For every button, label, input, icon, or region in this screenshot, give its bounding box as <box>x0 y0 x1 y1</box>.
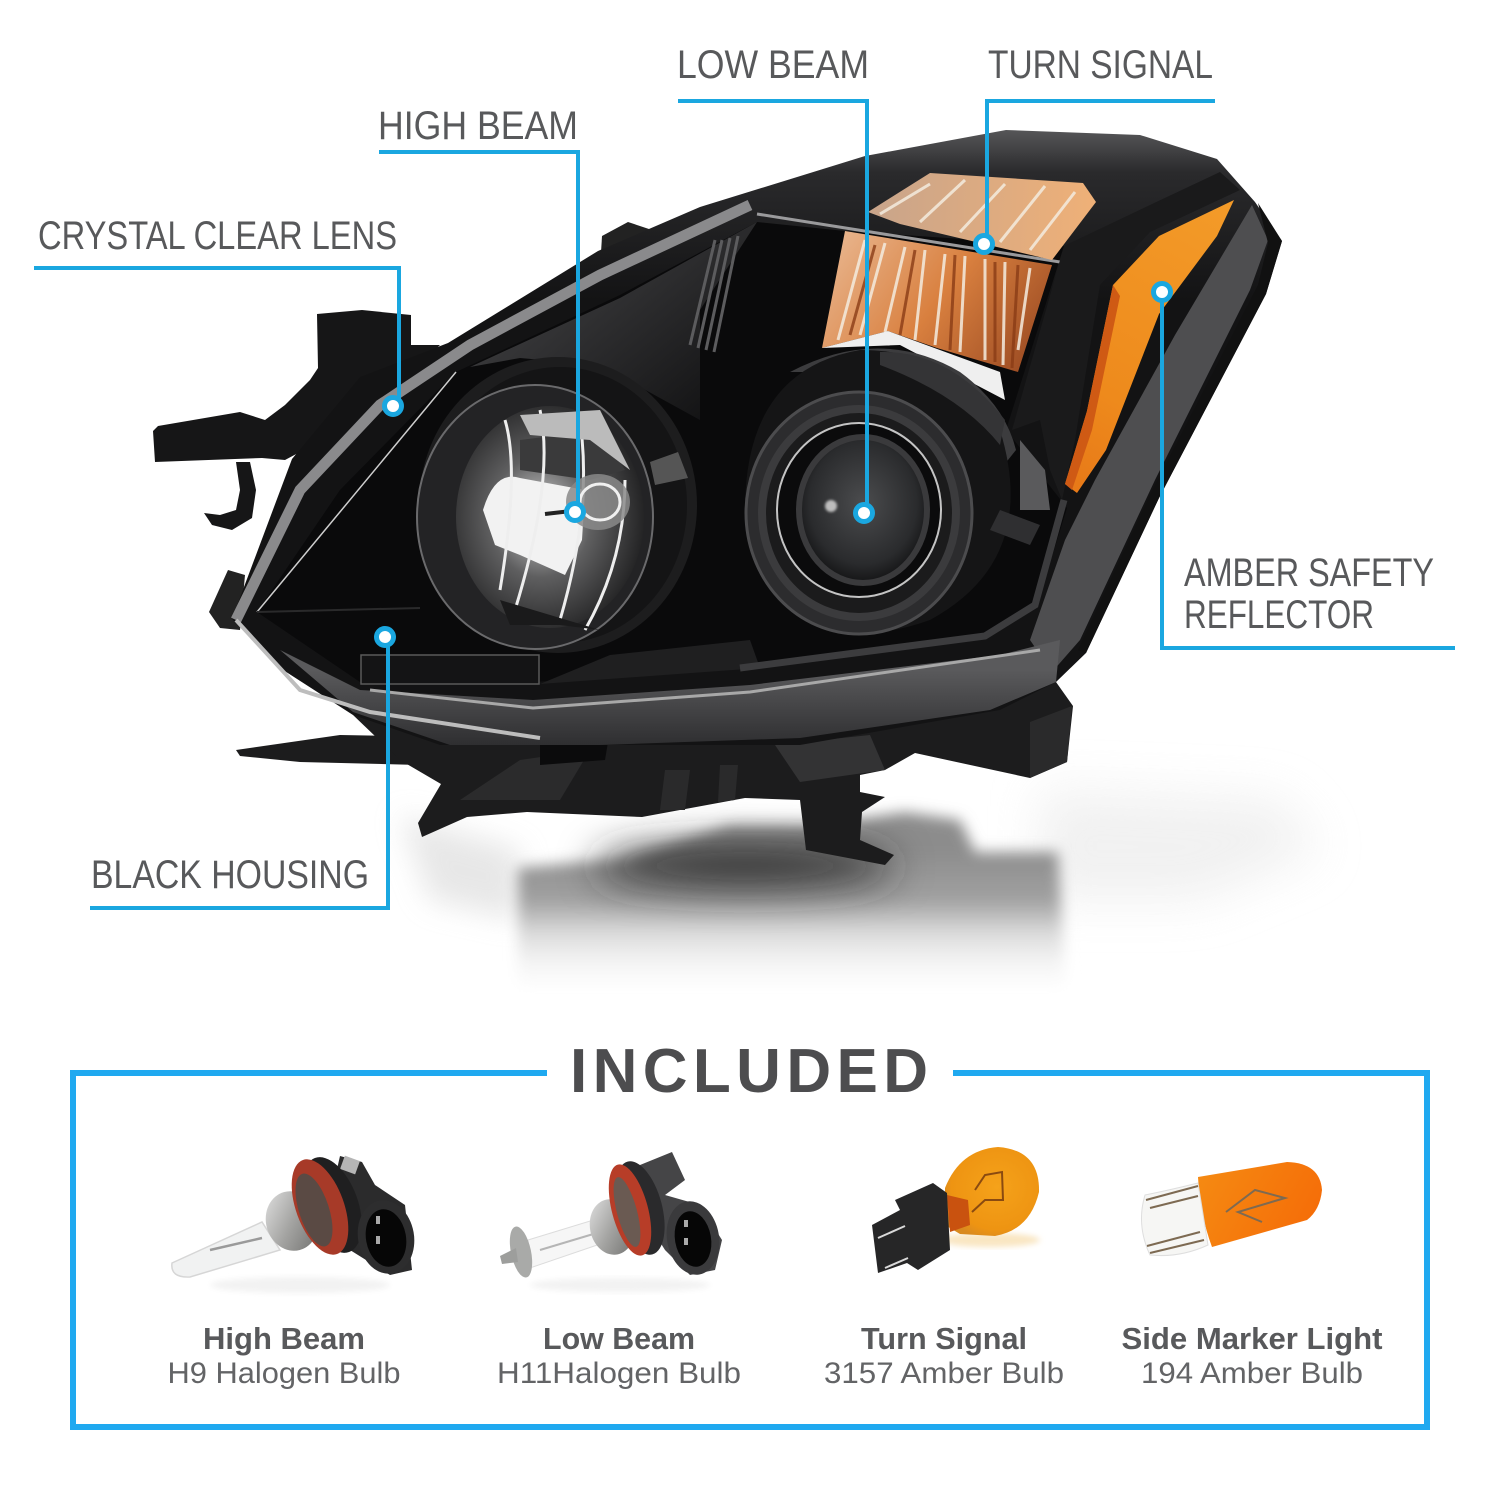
outer dark rim <box>1078 203 1282 653</box>
callout: turn signal <box>976 43 1215 252</box>
halogen bulb <box>545 474 630 530</box>
bulb item: side marker 194 <box>1122 1162 1382 1390</box>
icon: H11 bulb <box>500 1152 725 1292</box>
low beam outer ring <box>746 392 972 634</box>
caption: high beam: High Beam <box>203 1321 365 1356</box>
lower carbon lens band <box>280 640 1060 745</box>
leader line <box>1162 298 1455 648</box>
turn signal upper reflector <box>868 173 1096 260</box>
marker dot <box>384 398 402 414</box>
amber reflector darker edge <box>1065 285 1120 490</box>
reflector highlights <box>483 410 630 630</box>
bulb item: turn signal 3157 <box>824 1147 1064 1390</box>
turn signal lower reflector <box>822 231 1052 372</box>
high beam ring <box>417 385 653 649</box>
leader line <box>379 152 578 505</box>
black inner housing <box>257 222 1067 682</box>
leader line <box>987 101 1215 238</box>
marker dot <box>1154 284 1170 300</box>
headlight product illustration <box>153 130 1320 990</box>
shell tab <box>650 452 688 485</box>
lower black base <box>353 682 1073 865</box>
label: amber safety reflector: REFLECTOR <box>1184 593 1374 637</box>
marker dot <box>856 504 872 522</box>
caption: turn signal: Turn Signal <box>861 1321 1027 1356</box>
amber side marker reflector <box>1065 200 1234 493</box>
ribbed panel detail <box>690 236 738 352</box>
caption: low beam: Low Beam <box>543 1321 695 1356</box>
label: black housing: BLACK HOUSING <box>91 853 369 897</box>
caption: turn signal: 3157 Amber Bulb <box>824 1357 1064 1390</box>
panel border <box>73 1073 1427 1427</box>
low beam unit <box>745 348 1016 634</box>
label: high beam: HIGH BEAM <box>378 104 578 148</box>
low beam inner ring <box>777 423 941 597</box>
caption: side marker: Side Marker Light <box>1122 1321 1382 1356</box>
carbon side strip <box>1030 205 1268 672</box>
right black lower housing highlights <box>740 440 1064 668</box>
callout: high beam <box>378 104 584 520</box>
low beam upper shroud <box>790 348 1016 470</box>
label: turn signal: TURN SIGNAL <box>988 43 1213 87</box>
projector lens <box>799 437 927 583</box>
label: crystal clear lens: CRYSTAL CLEAR LENS <box>38 214 397 258</box>
leader line <box>34 268 399 400</box>
label: low beam: LOW BEAM <box>677 43 869 87</box>
ground shadow <box>400 790 1320 990</box>
marker dot <box>566 504 584 520</box>
panel: included <box>73 1037 1427 1427</box>
high beam outer shell <box>419 357 697 653</box>
turn signal ribs <box>838 180 1075 365</box>
caption: low beam: H11Halogen Bulb <box>497 1357 741 1390</box>
callout: amber safety reflector <box>1154 284 1455 648</box>
mounting brackets <box>153 222 655 765</box>
heading: INCLUDED <box>570 1037 928 1106</box>
high beam reflector <box>456 406 644 628</box>
bulb item: low beam H11 <box>497 1152 741 1390</box>
icon: 194 amber bulb <box>1141 1162 1322 1256</box>
high beam unit <box>417 357 697 653</box>
icon: 3157 amber bulb <box>872 1147 1040 1273</box>
caption: high beam: H9 Halogen Bulb <box>168 1357 400 1390</box>
caption: side marker: 194 Amber Bulb <box>1141 1357 1363 1390</box>
marker dot <box>976 236 992 252</box>
lens bezel strip <box>236 205 750 620</box>
callout: black housing <box>90 628 394 908</box>
marker dot <box>376 628 394 646</box>
bulb item: high beam H9 <box>168 1149 420 1390</box>
callout: crystal clear lens <box>34 214 402 414</box>
dark frame around amber <box>1012 172 1240 500</box>
leader line <box>90 643 388 908</box>
label: amber safety reflector: AMBER SAFETY <box>1184 551 1434 595</box>
icon: H9 bulb <box>172 1149 420 1293</box>
leader line <box>678 101 867 505</box>
callout: low beam <box>677 43 872 522</box>
lower housing label plate <box>257 608 760 684</box>
lamp outer shell <box>232 130 1282 745</box>
